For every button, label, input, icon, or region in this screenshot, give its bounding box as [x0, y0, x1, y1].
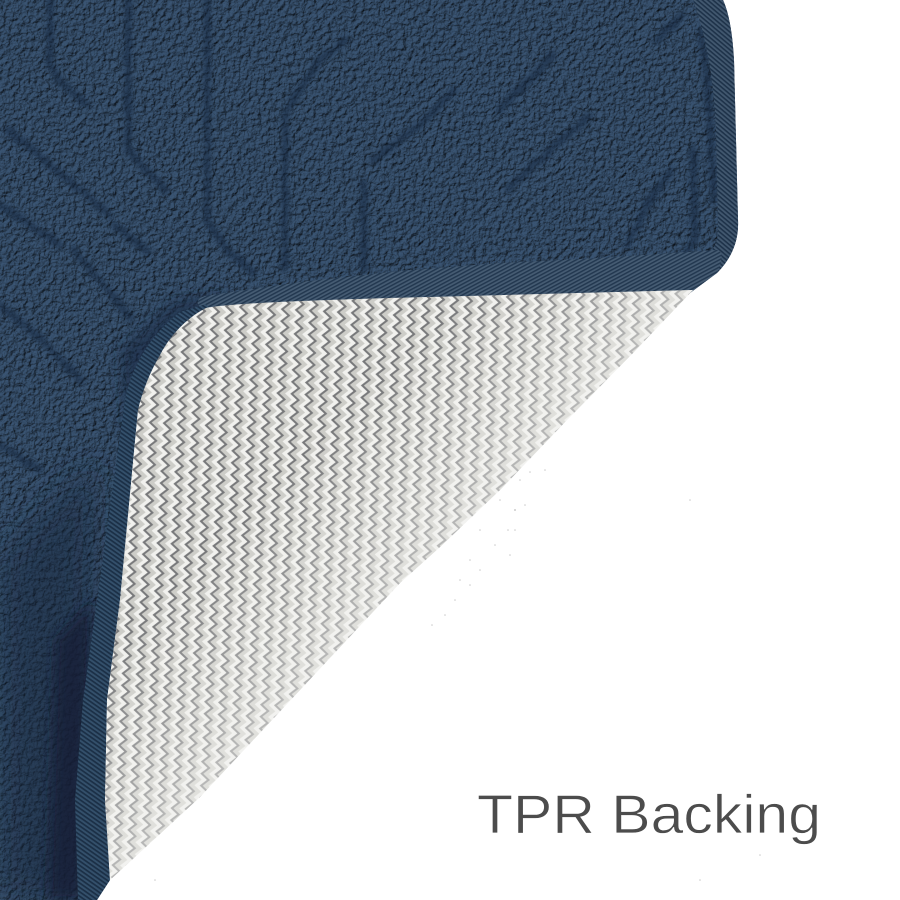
speckles along the fold shadow: [154, 469, 761, 881]
panel: grey zigzag TPR backing: [100, 280, 720, 900]
binding: bottom edge: [197, 250, 722, 309]
dark shadow along the lower left fold: [0, 460, 95, 900]
title: TPR Backing: TPR Backing: [477, 784, 821, 845]
binding: right edge: [693, 0, 738, 273]
binding: left edge: [75, 304, 210, 900]
embossed groove pattern: [0, 0, 714, 470]
